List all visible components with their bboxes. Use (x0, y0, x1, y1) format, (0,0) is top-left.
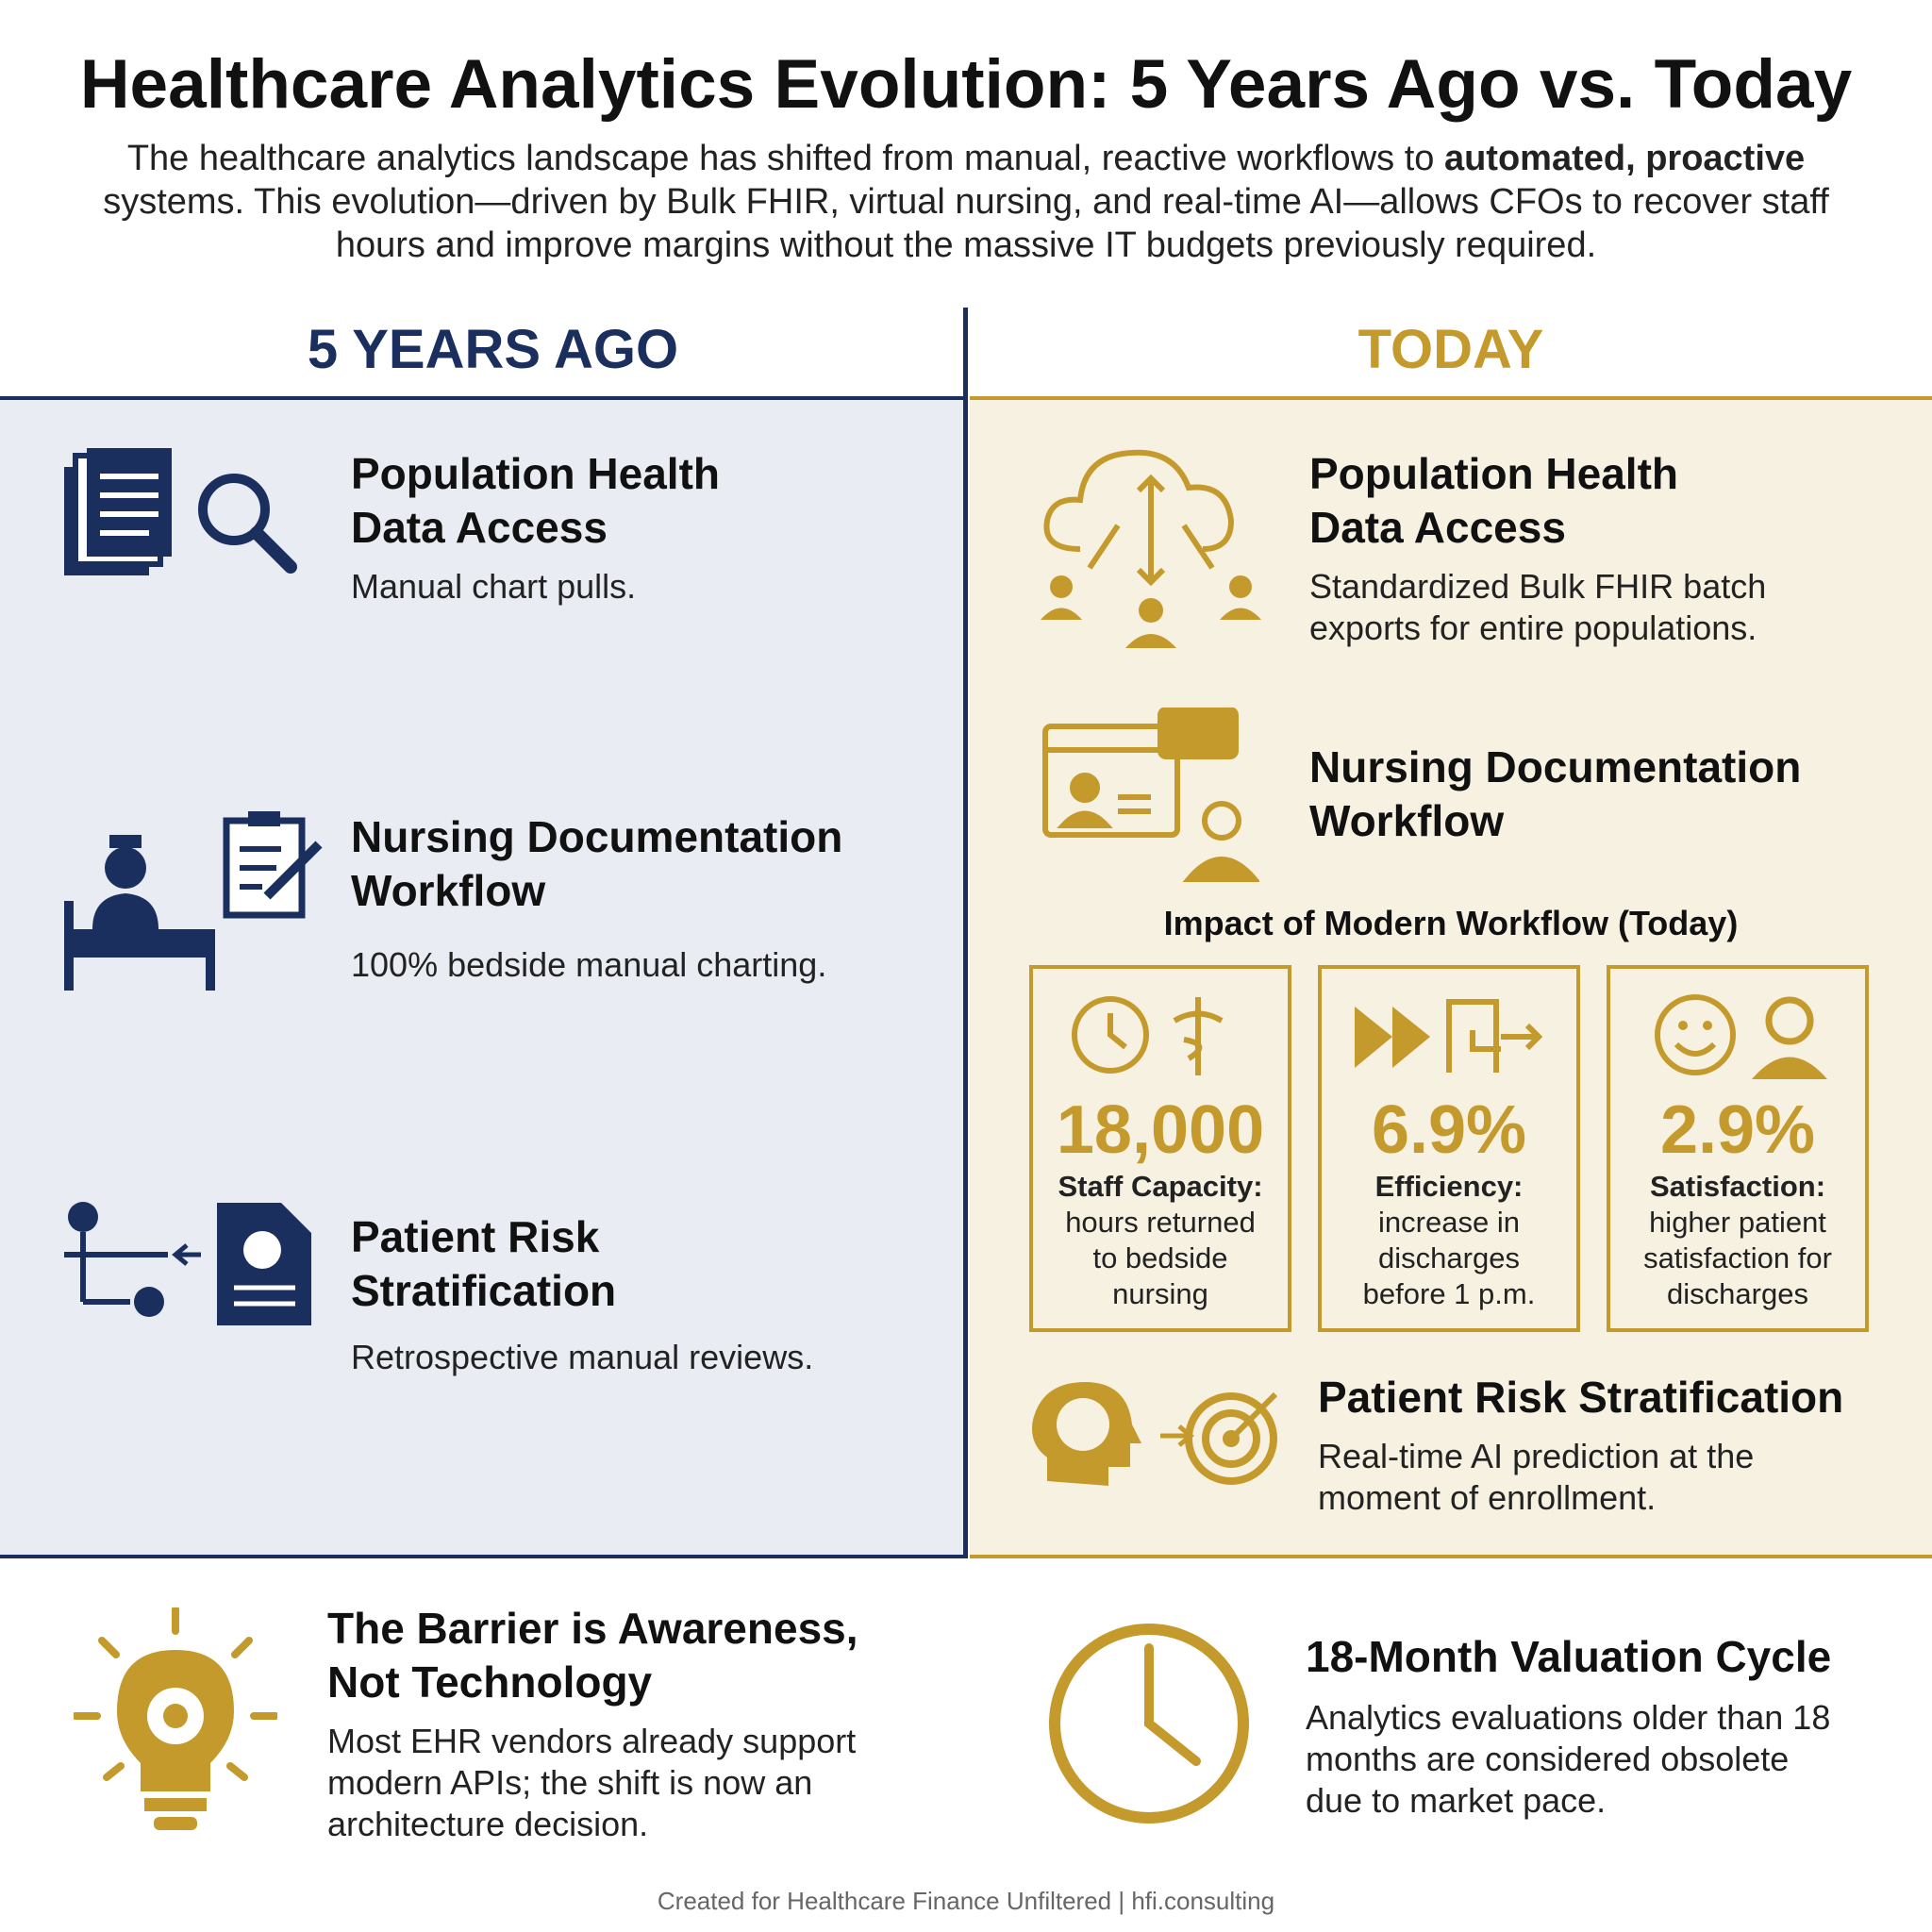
right item: population health: Population Health (1309, 449, 1678, 498)
icon: nurse bed clipboard (64, 811, 323, 991)
left item: population health: Manual chart pulls. (351, 567, 636, 606)
stat box: efficiency: Efficiency: (1375, 1170, 1523, 1203)
icon: cloud people (1041, 449, 1261, 648)
left item: nursing: 100% bedside manual charting. (351, 945, 826, 984)
icon: documents magnifier (64, 448, 297, 575)
bottom: valuation cycle: 18-Month Valuation Cycle (1306, 1632, 1831, 1681)
bottom: barrier (327, 1604, 858, 1843)
stat box: satisfaction: satisfaction for (1643, 1241, 1832, 1274)
bottom: barrier: Not Technology (327, 1657, 652, 1707)
title: Healthcare Analytics Evolution: 5 Years Ago vs. Today (80, 46, 1852, 123)
divider (963, 308, 968, 1558)
right item: population health: Data Access (1309, 503, 1566, 552)
heading: today: TODAY (1358, 319, 1543, 380)
subtitle: The healthcare analytics landscape has shifted from manual, reactive workflows to automated, proactive systems. This evolution—driven by Bulk FHIR, virtual nursing, and real-time AI—allows CFOs to recover staff hours and improve margins without the massive IT budgets previously required. (103, 139, 1829, 265)
right item: nursing: Nursing Documentation (1309, 742, 1801, 791)
footer: Created for Healthcare Finance Unfiltered | hfi.consulting (658, 1887, 1274, 1915)
icon: lightbulb gear (74, 1607, 277, 1830)
left item: risk: Patient Risk (351, 1212, 599, 1261)
right item: population health (1309, 449, 1766, 647)
stat box: staff capacity: hours returned (1065, 1206, 1256, 1239)
bottom: valuation cycle: months are considered obsolete (1306, 1740, 1789, 1778)
left item: risk: Retrospective manual reviews. (351, 1338, 813, 1376)
bottom: valuation cycle: Analytics evaluations older than 18 (1306, 1698, 1830, 1737)
left item: population health: Data Access (351, 503, 608, 552)
left item: population health: Population Health (351, 449, 720, 498)
stat box: efficiency: before 1 p.m. (1363, 1277, 1535, 1310)
stat box: satisfaction: 2.9% (1660, 1092, 1815, 1168)
icon: brain target (1032, 1382, 1277, 1486)
stat box: staff capacity: 18,000 (1057, 1092, 1264, 1168)
right item: risk: Patient Risk Stratification (1318, 1373, 1843, 1422)
left item: nursing: Nursing Documentation (351, 812, 842, 861)
right panel background (970, 396, 1932, 1558)
right item: population health: Standardized Bulk FHIR batch (1309, 567, 1766, 606)
impact heading: Impact of Modern Workflow (Today) (1164, 904, 1738, 942)
right item: nursing (1309, 742, 1801, 845)
stat box: satisfaction: higher patient (1649, 1206, 1826, 1239)
stat box: efficiency (1318, 965, 1580, 1332)
bottom: barrier: Most EHR vendors already support (327, 1722, 856, 1760)
stat box: satisfaction: Satisfaction: (1650, 1170, 1825, 1203)
stat box: staff capacity (1029, 965, 1291, 1332)
icon: flow document (64, 1202, 311, 1325)
left item: population health (351, 449, 720, 606)
right item: nursing: Workflow (1309, 796, 1504, 845)
stat box: staff capacity: nursing (1112, 1277, 1208, 1310)
stat box: efficiency: 6.9% (1372, 1092, 1526, 1168)
stat box: satisfaction: discharges (1667, 1277, 1808, 1310)
bottom: valuation cycle (1306, 1632, 1831, 1820)
icon: clock (1049, 1624, 1249, 1824)
stat box: staff capacity: to bedside (1092, 1241, 1228, 1274)
stat box: satisfaction (1607, 965, 1869, 1332)
left item: nursing (351, 812, 842, 984)
bottom: barrier: The Barrier is Awareness, (327, 1604, 858, 1653)
left item: nursing: Workflow (351, 866, 545, 915)
right item: population health: exports for entire populations. (1309, 608, 1757, 647)
left panel background (0, 396, 965, 1558)
left item: risk (351, 1212, 813, 1376)
heading: 5 years ago: 5 YEARS AGO (308, 319, 678, 380)
icon: virtual nurse (1042, 708, 1259, 882)
bottom: valuation cycle: due to market pace. (1306, 1781, 1606, 1820)
right item: risk: Real-time AI prediction at the (1318, 1437, 1754, 1475)
left item: risk: Stratification (351, 1266, 616, 1315)
stat box: efficiency: discharges (1378, 1241, 1520, 1274)
bottom: barrier: modern APIs; the shift is now an (327, 1763, 812, 1802)
bottom: barrier: architecture decision. (327, 1805, 648, 1843)
stat box: efficiency: increase in (1378, 1206, 1520, 1239)
right item: risk (1318, 1373, 1843, 1517)
stat box: staff capacity: Staff Capacity: (1058, 1170, 1263, 1203)
right item: risk: moment of enrollment. (1318, 1478, 1656, 1517)
